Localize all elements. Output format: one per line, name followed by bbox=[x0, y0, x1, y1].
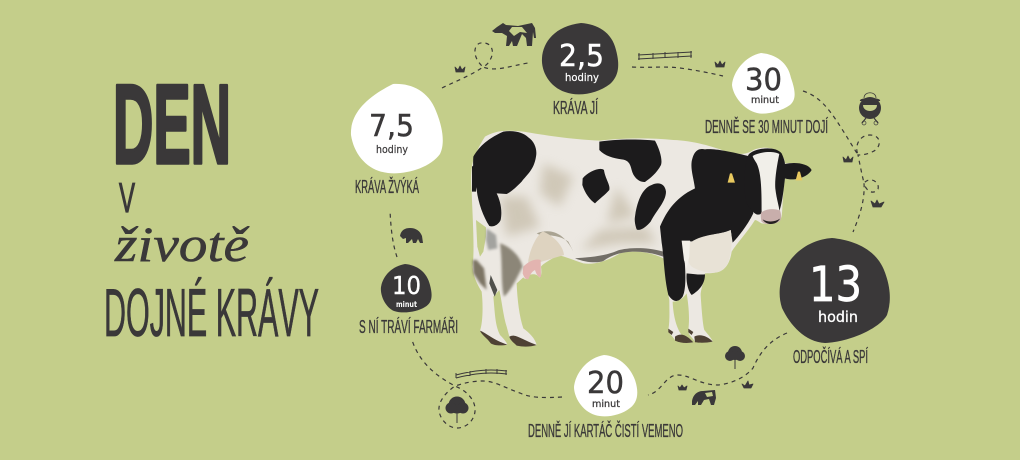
bubble: 30 minut: 30 bbox=[745, 63, 782, 98]
bubble: 10 minut bbox=[381, 264, 432, 312]
bubble: 20 minut: minut bbox=[592, 399, 620, 410]
oval patch bbox=[635, 183, 666, 230]
shading bbox=[500, 163, 657, 250]
icon: grazing cow top bbox=[492, 23, 536, 46]
head bbox=[744, 148, 812, 215]
icon: tree left bbox=[446, 396, 468, 423]
hooves bbox=[480, 329, 713, 347]
udder bbox=[528, 232, 564, 267]
ear tags bbox=[728, 173, 735, 183]
heading: životě: životě bbox=[114, 216, 250, 272]
green gap between tail and leg bbox=[476, 220, 486, 257]
neck and shoulder patch bbox=[660, 149, 753, 301]
blaze bbox=[753, 152, 779, 213]
label: kráva žvýká: KRÁVA ŽVÝKÁ bbox=[355, 177, 419, 197]
title: DEN bbox=[113, 62, 231, 187]
text: DOJNÉ KRÁVY bbox=[104, 275, 319, 351]
bubble: 2,5 hodiny: hodiny bbox=[565, 71, 599, 84]
back patch bbox=[599, 140, 661, 182]
bubble: 13 hodin bbox=[780, 238, 890, 343]
bubble: 20 minut: 20 bbox=[587, 366, 624, 401]
heading: v: V bbox=[119, 174, 135, 221]
bubble: 13 hodin: hodin bbox=[818, 308, 858, 326]
fore leg patch bbox=[686, 273, 705, 295]
bubble: 7,5 hodiny: hodiny bbox=[376, 143, 408, 156]
bubble: 10 minut: minut bbox=[396, 300, 417, 309]
photo: dairy cow bbox=[471, 131, 812, 347]
icon: farmer bbox=[859, 93, 881, 125]
cow body bbox=[471, 131, 812, 346]
icon: grazing cow bottom bbox=[692, 390, 716, 405]
bubble: 13 hodin: 13 bbox=[809, 257, 862, 313]
tail black top bbox=[472, 163, 476, 192]
icon: fence top bbox=[638, 51, 692, 60]
bubble: 7,5 hodiny: 7,5 bbox=[369, 109, 414, 144]
shade under belly bbox=[575, 248, 663, 262]
dashed trail bbox=[390, 43, 879, 428]
bubble: 30 minut: minut bbox=[751, 95, 779, 106]
label: s ní tráví farmáři: S NÍ TRÁVÍ FARMÁŘI bbox=[359, 317, 458, 337]
black patches bbox=[473, 131, 812, 301]
muzzle bbox=[761, 209, 781, 224]
icon: grazing cow left bbox=[400, 228, 423, 243]
label: denně se 30 minut dojí: DENNĚ SE 30 MINUT DOJÍ bbox=[705, 117, 828, 137]
rump patch bbox=[473, 131, 536, 226]
title bbox=[104, 62, 319, 351]
bubble: 7,5 hodiny bbox=[351, 84, 443, 173]
hind leg dirt bbox=[500, 243, 523, 297]
icon: tree right bbox=[725, 346, 745, 369]
label: odpočívá a spí: ODPOČÍVÁ A SPÍ bbox=[793, 346, 868, 367]
icon: fence bottom bbox=[456, 369, 507, 378]
bubble: 2,5 hodiny bbox=[542, 23, 618, 94]
label: denně jí kartáč čistí vemeno: DENNĚ JÍ KARTÁČ ČISTÍ VEMENO bbox=[528, 420, 683, 441]
bubble: 30 minut bbox=[732, 53, 795, 114]
bubble: 20 minut bbox=[574, 355, 637, 416]
white patch of chest bbox=[687, 230, 732, 273]
flank patch bbox=[582, 169, 610, 203]
bubble: 2,5 hodiny: 2,5 bbox=[559, 39, 604, 74]
icon: grass tufts bbox=[455, 61, 884, 390]
label: kráva jí: KRÁVA JÍ bbox=[553, 98, 598, 118]
bubble: 10 minut: 10 bbox=[392, 271, 421, 300]
